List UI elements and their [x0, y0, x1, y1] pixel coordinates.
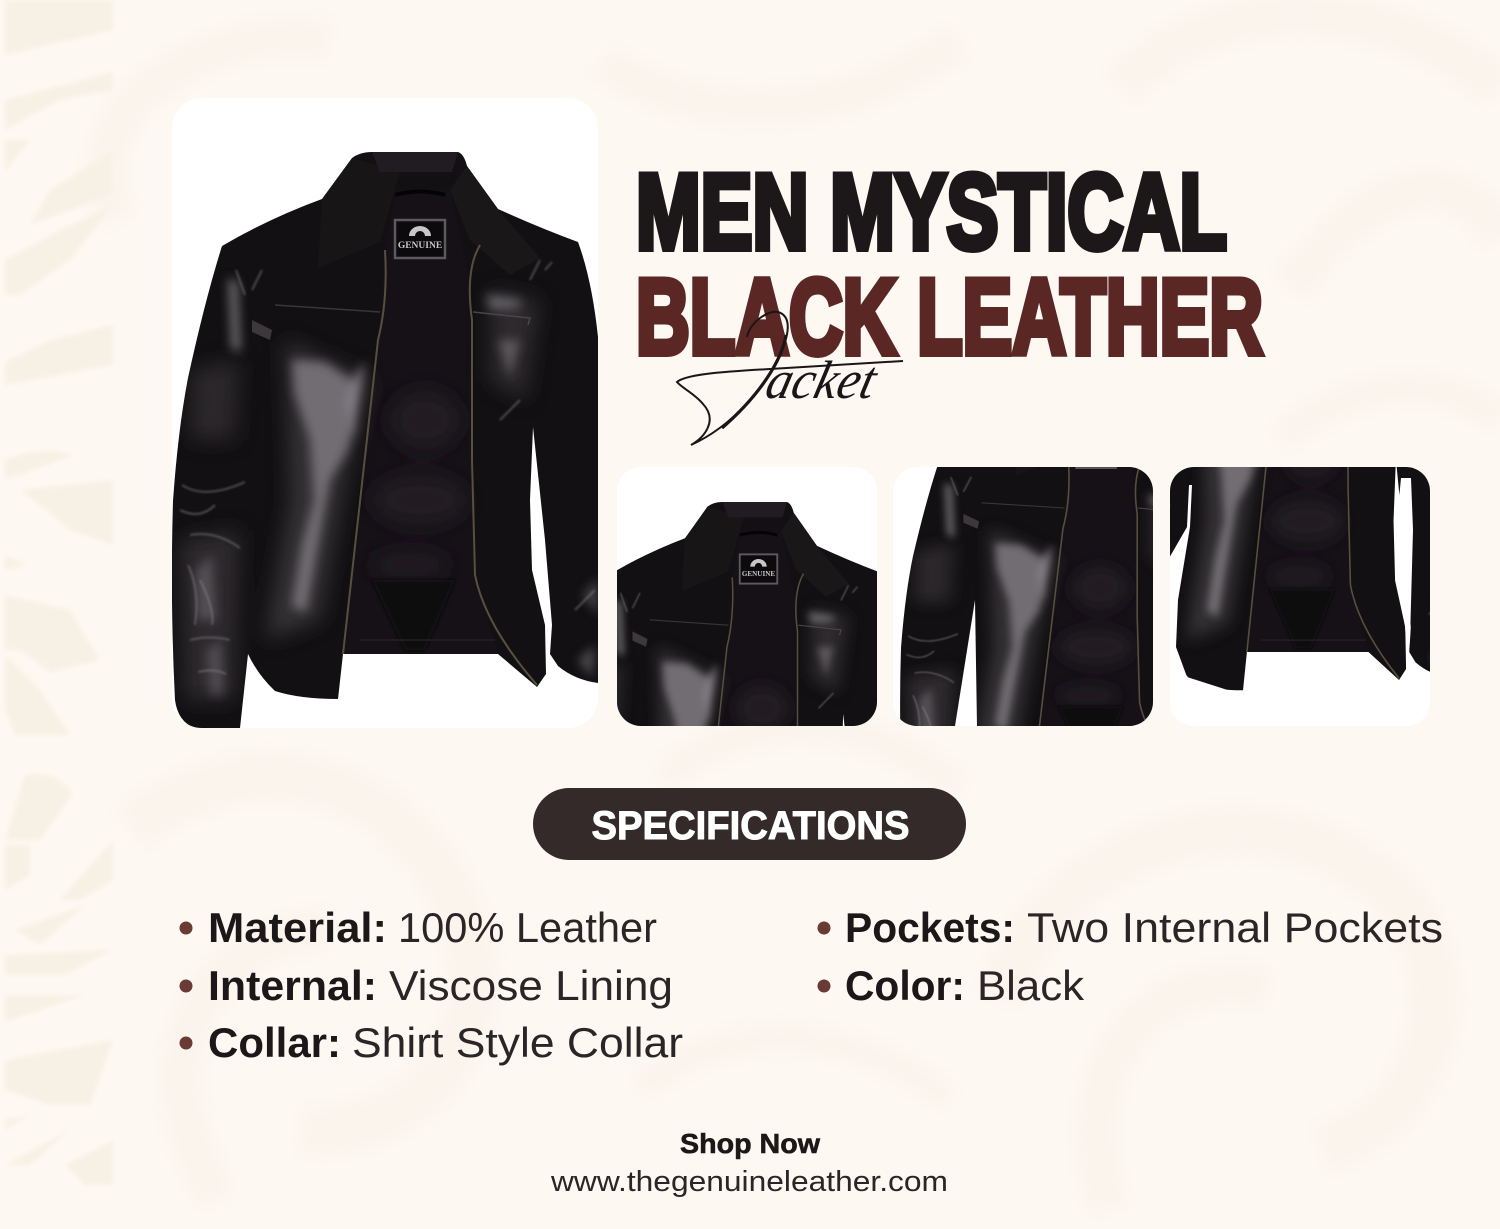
call to action — [550, 1128, 948, 1198]
thumbnail: collar view — [617, 467, 1146, 726]
spec: color — [818, 962, 1085, 1009]
website url: www.thegenuineleather.com — [550, 1166, 948, 1198]
spec: pockets: Two Internal Pockets — [1027, 904, 1443, 951]
main product photo card — [165, 98, 605, 740]
spec: internal: Internal: — [208, 962, 377, 1009]
spec: collar — [180, 1019, 683, 1066]
script word: Jacket — [677, 312, 903, 445]
thumbnail: hem view — [1170, 467, 1430, 726]
specification list: right column — [818, 904, 1443, 1009]
spec: color: Color: — [845, 962, 965, 1009]
spec: internal: Viscose Lining — [389, 962, 673, 1009]
icon: black leather jacket — [165, 140, 605, 740]
title line 1: MEN MYSTICAL — [636, 152, 1227, 272]
specification list: left column — [180, 904, 683, 1066]
spec: pockets: Pockets: — [845, 904, 1015, 951]
spec: collar: Shirt Style Collar — [352, 1019, 683, 1066]
thumbnail: sleeve view — [893, 381, 1242, 825]
specifications badge — [533, 788, 966, 860]
title — [636, 152, 1263, 376]
script word: Jacket: Jacket — [760, 350, 885, 410]
specifications badge: SPECIFICATIONS — [592, 804, 910, 848]
spec: pockets — [818, 904, 1443, 951]
shop now label: Shop Now — [680, 1128, 820, 1159]
spec: internal — [180, 962, 673, 1009]
spec: collar: Collar: — [208, 1019, 341, 1066]
spec: material — [180, 904, 657, 951]
spec: material: Material: — [208, 904, 387, 951]
spec: color: Black — [977, 962, 1085, 1009]
spec: material: 100% Leather — [398, 904, 657, 951]
left watermark lettering — [5, 0, 113, 1185]
